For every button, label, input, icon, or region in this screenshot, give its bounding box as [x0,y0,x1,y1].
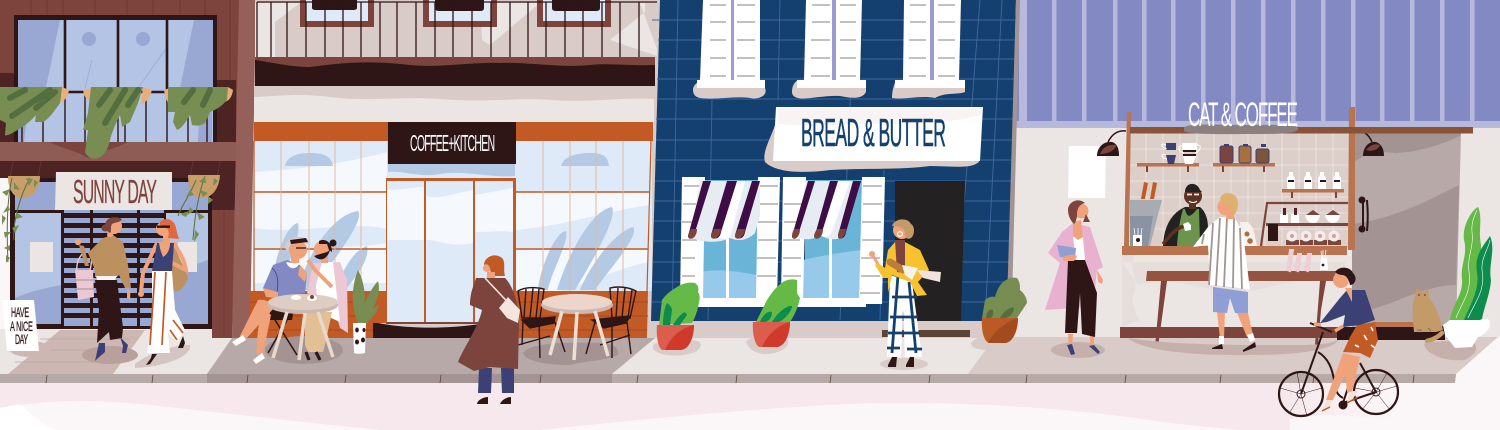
person: woman in pink coat [1045,200,1105,358]
man in pink cardigan [305,240,348,360]
cafe table and chairs [518,287,636,365]
hanging plants upper [0,87,233,159]
coffee machine [1130,182,1162,246]
plant pot 2 [746,279,800,354]
display case [1261,203,1348,246]
high table [1146,271,1336,347]
person: woman in tan sweater [75,217,138,364]
sign: have a nice day: DAY [15,333,28,348]
upper window 1 [693,0,766,99]
right chair [586,287,636,358]
kiosk back wall [1130,133,1350,248]
plant pot 3 [971,278,1027,350]
plaster band [254,86,654,122]
plaster wall [1008,128,1500,337]
kiosk roof bar [1130,127,1473,134]
door panel [1352,133,1461,328]
balcony band [0,142,237,161]
base wall [651,321,1008,338]
upper windows [300,0,611,27]
cat [1413,288,1443,341]
upper window 3 [892,0,965,98]
upper facade reflections [255,3,660,57]
shop windows [680,180,866,307]
counter [1122,246,1347,338]
wall lamp right [1355,131,1384,156]
shop sign: SUNNY DAY [73,175,157,211]
barista [1163,184,1208,246]
re-draw pillar edge [652,0,668,338]
cup planter [1424,207,1492,360]
bicycle [1279,323,1398,416]
table [268,294,338,360]
plant pot 1 [653,283,701,356]
orange fascia [254,122,653,141]
sidewalk [0,329,1498,383]
person: woman in striped trousers [135,219,190,368]
sign: have a nice day [2,300,51,357]
milk bottles [1287,172,1341,189]
building: Bread & Butter [651,0,1016,338]
sign: have a nice day: HAVE [11,306,29,321]
door mat [1337,322,1445,340]
person: customer in striped shirt [1193,193,1256,352]
awning 2 [792,181,861,239]
shop window [10,178,212,329]
shutters [680,177,885,304]
potted plant white [353,270,379,354]
balcony railing [257,2,657,57]
balcony band [255,57,655,86]
base plank [1120,327,1340,355]
building: Sunny Day [0,0,256,357]
cafe table with couple [232,237,348,364]
bread sign: BREAD & BUTTER [801,112,946,155]
person: woman in yellow jacket [869,219,941,370]
sign: have a nice day: A NICE [10,320,33,335]
person: cyclist [1279,268,1398,416]
building: Coffee + Kitchen [250,0,668,338]
shutter [61,210,166,326]
poster [1068,146,1106,198]
shop sign [55,172,172,211]
coffee jars [1220,144,1269,163]
kiosk posts [1124,107,1355,250]
kiosk shelves [1137,163,1344,198]
left window [254,141,387,291]
rider [1314,268,1378,411]
person: woman in brown coat [458,255,520,404]
right window [515,141,652,291]
building: Cat & Coffee [1006,0,1500,360]
left chair [518,288,565,358]
kiosk sign: CAT & COFFEE [1188,96,1298,134]
cookie jar [1240,222,1257,246]
upper window [14,15,217,142]
shop sign: COFFEE+KITCHEN [410,130,495,156]
cups on shelf [1162,143,1200,164]
awning 1 [688,181,760,242]
table items [1287,250,1328,271]
lower soffit [0,161,236,212]
orange wainscot [250,291,387,338]
upper window 2 [792,0,866,98]
door [895,181,965,321]
bread sign [764,107,983,172]
corner pillar [232,0,256,338]
shop sign [388,122,516,164]
glass door [373,164,516,338]
wall lamp left [1097,131,1126,156]
facade pillars [1019,0,1474,125]
hanging baskets [2,175,220,263]
man in blue shirt [232,237,310,364]
table [541,294,613,360]
